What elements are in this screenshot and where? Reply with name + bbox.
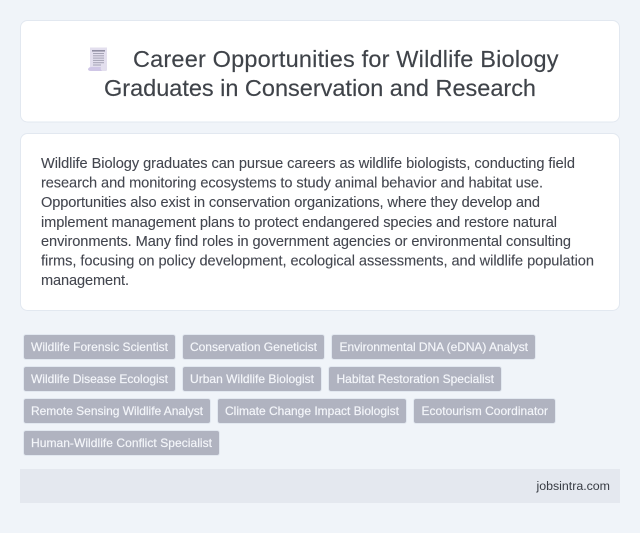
tag — [328, 366, 502, 392]
tag — [218, 398, 406, 424]
tag: Ecotourism Coordinator — [422, 404, 548, 418]
tag — [24, 430, 220, 456]
icon: paper scroll — [88, 48, 107, 71]
footer source text: jobsintra.com — [536, 479, 610, 493]
title: Graduates in Conservation and Research — [104, 75, 536, 101]
tag: Conservation Geneticist — [190, 340, 318, 354]
text block: description paragraph: environments. Many find roles in government agencies or environmental consulting — [41, 234, 571, 250]
panel: title card — [20, 20, 620, 122]
tag: Urban Wildlife Biologist — [190, 372, 315, 386]
tag — [414, 398, 556, 424]
tag: Climate Change Impact Biologist — [225, 404, 400, 418]
text block: description paragraph: Opportunities also exist in conservation organizations, where they develop and — [41, 195, 540, 211]
tag: Habitat Restoration Specialist — [336, 372, 495, 386]
text block: description paragraph: research and monitoring ecosystems to study animal behavior and habitat use. — [41, 176, 543, 192]
footer — [20, 469, 620, 503]
tag — [24, 366, 176, 392]
tag: Environmental DNA (eDNA) Analyst — [340, 340, 529, 354]
text block: description paragraph — [41, 156, 594, 289]
tag: Wildlife Disease Ecologist — [31, 372, 169, 386]
tag: Human-Wildlife Conflict Specialist — [31, 436, 213, 450]
panel: description — [20, 134, 620, 310]
tag: Wildlife Forensic Scientist — [31, 340, 169, 354]
tag — [24, 334, 176, 360]
text block: description paragraph: Wildlife Biology graduates can pursue careers as wildlife biologists, conducting field — [41, 156, 575, 172]
tag — [24, 398, 210, 424]
title: Career Opportunities for Wildlife Biology — [133, 46, 559, 72]
tag — [182, 334, 324, 360]
text block: description paragraph: implement management plans to protect endangered species and restore natural — [41, 215, 557, 231]
title — [104, 46, 559, 101]
text block: description paragraph: management. — [41, 273, 129, 289]
tag — [332, 334, 536, 360]
text block: description paragraph: firms, focusing on policy development, ecological assessments, and wildlife population — [41, 254, 594, 270]
tag: Remote Sensing Wildlife Analyst — [31, 404, 204, 418]
tag — [182, 366, 322, 392]
tag list — [24, 334, 556, 456]
